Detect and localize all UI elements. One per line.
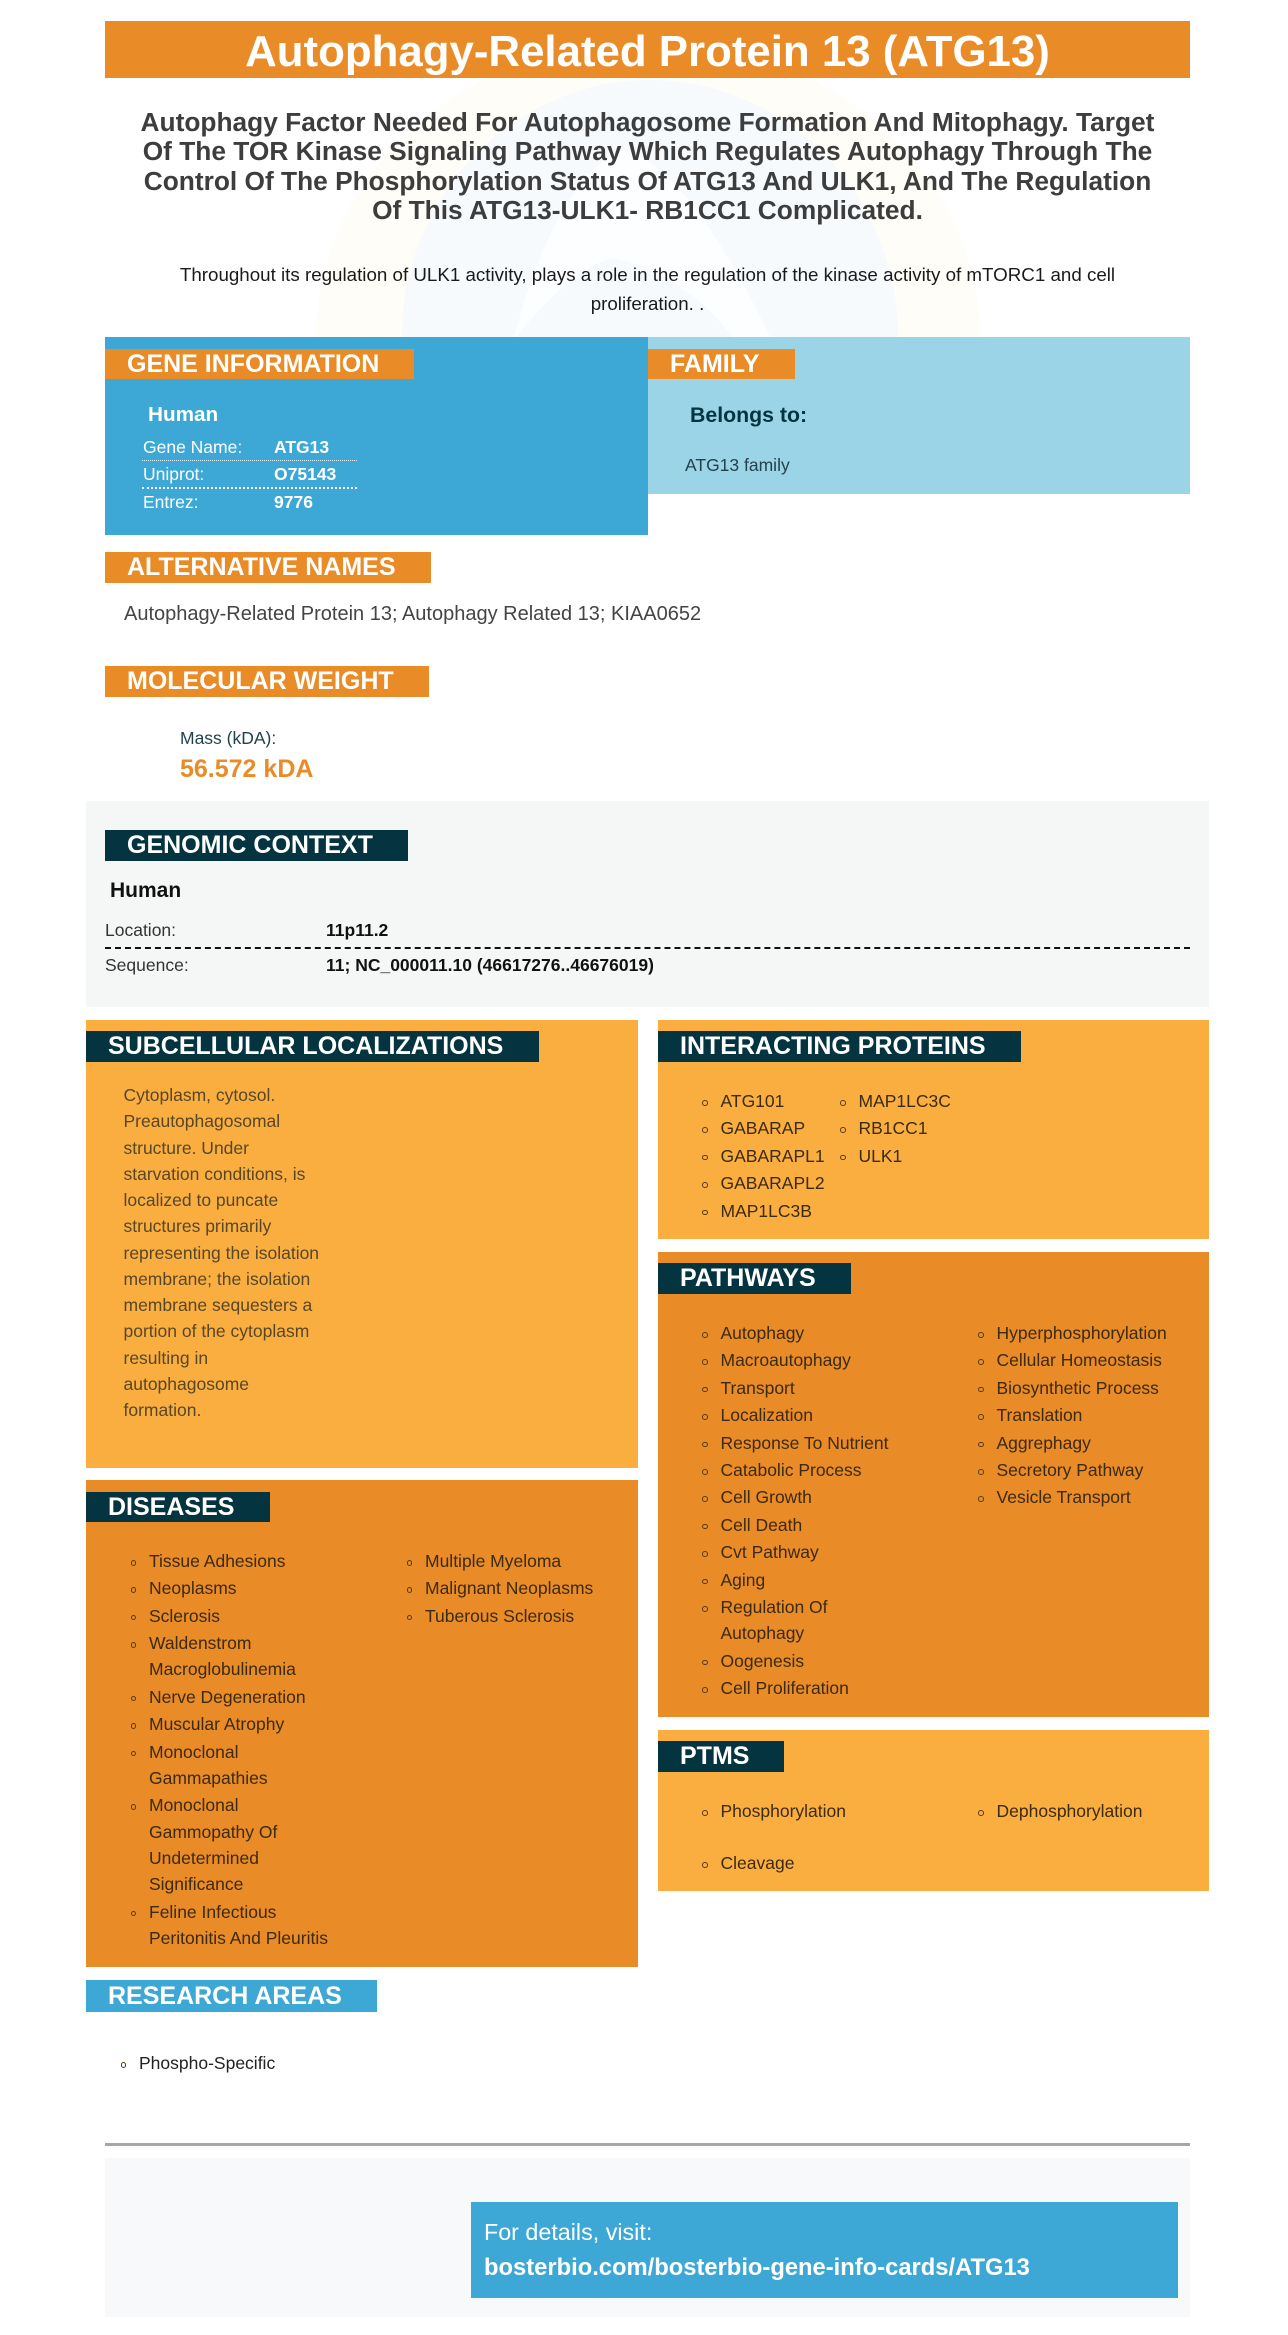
pathway list column 2: Hyperphosphorylation	[996, 1323, 1167, 1343]
heading: ptms	[658, 1741, 784, 1772]
pathway list column 2: Vesicle Transport	[996, 1487, 1131, 1507]
disease list column 1: Neoplasms	[149, 1578, 237, 1598]
gene table: Entrez:	[143, 492, 198, 512]
species label: Human	[110, 879, 181, 902]
disease list column 1: Gammapathies	[149, 1768, 268, 1788]
gene table: Gene Name:	[143, 437, 242, 457]
heading: gene information: GENE INFORMATION	[127, 350, 379, 378]
heading: pathways	[658, 1263, 851, 1294]
panel: interacting proteins	[658, 1020, 1209, 1239]
disease list column 1: Macroglobulinemia	[149, 1659, 296, 1679]
localization text: starvation conditions, is	[124, 1164, 305, 1184]
gene table: Uniprot:	[143, 464, 204, 484]
location row: 11p11.2	[326, 920, 388, 940]
pathway list column 1: Cell Proliferation	[720, 1678, 849, 1698]
protein list column 2: ULK1	[858, 1146, 902, 1166]
disease list column 1	[131, 1551, 328, 1948]
gene table	[142, 437, 357, 512]
mass value: 56.572 kDA	[180, 755, 313, 783]
disease list column 1: Sclerosis	[149, 1606, 220, 1626]
alternative names text: Autophagy-Related Protein 13; Autophagy Related 13; KIAA0652	[124, 603, 701, 625]
gene table: O75143	[274, 464, 336, 484]
heading: genomic context: GENOMIC CONTEXT	[127, 831, 373, 859]
location row	[105, 920, 388, 940]
subtitle	[141, 107, 1154, 225]
callout: details link: For details, visit:	[484, 2219, 652, 2245]
heading: family	[648, 349, 795, 379]
background watermark arches	[402, 80, 898, 337]
protein list column 1: GABARAPL1	[720, 1146, 825, 1166]
heading: pathways: PATHWAYS	[680, 1264, 816, 1292]
subtitle: Of The TOR Kinase Signaling Pathway Which Regulates Autophagy Through The	[143, 136, 1152, 166]
ptm list column 1	[702, 1801, 846, 1873]
pathway list column 1: Autophagy	[720, 1623, 804, 1643]
title: Autophagy-Related Protein 13 (ATG13)	[245, 27, 1050, 76]
heading: diseases: DISEASES	[108, 1493, 234, 1521]
pathway list column 1: Autophagy	[720, 1323, 804, 1343]
callout: details link	[471, 2202, 1178, 2298]
pathway list column 1: Macroautophagy	[720, 1350, 851, 1370]
disease list column 2	[407, 1551, 593, 1626]
sequence row	[105, 955, 654, 975]
localization text: membrane sequesters a	[124, 1295, 312, 1315]
pathway list column 2: Aggrephagy	[996, 1433, 1091, 1453]
description: Throughout its regulation of ULK1 activity, plays a role in the regulation of the kinase activity of mTORC1 and cell	[180, 264, 1115, 285]
protein list column 1: GABARAPL2	[720, 1173, 825, 1193]
heading: molecular weight: MOLECULAR WEIGHT	[127, 667, 394, 695]
disease list column 1: Peritonitis And Pleuritis	[149, 1928, 328, 1948]
pathway list column 1: Aging	[720, 1570, 765, 1590]
pathway list column 1: Transport	[720, 1378, 795, 1398]
panel: diseases	[86, 1480, 638, 1967]
protein list column 2: MAP1LC3C	[858, 1091, 951, 1111]
disease list column 1: Gammopathy Of	[149, 1822, 277, 1842]
panel: genomic context	[86, 801, 1209, 1007]
belongs to label: Belongs to:	[690, 403, 807, 427]
protein list column 1: MAP1LC3B	[720, 1201, 812, 1221]
heading: research areas: RESEARCH AREAS	[108, 1982, 342, 2010]
pathway list column 2: Translation	[996, 1405, 1082, 1425]
pathway list column 1: Cell Death	[720, 1515, 802, 1535]
subtitle: Control Of The Phosphorylation Status Of ATG13 And ULK1, And The Regulation	[144, 166, 1151, 196]
protein list column 1: GABARAP	[720, 1118, 805, 1138]
disease list column 1: Muscular Atrophy	[149, 1714, 284, 1734]
pathway list column 1	[702, 1323, 888, 1698]
localization text: membrane; the isolation	[124, 1269, 310, 1289]
protein list column 2: RB1CC1	[858, 1118, 928, 1138]
mass label: Mass (kDA):	[180, 728, 276, 748]
panel: subcellular localizations	[86, 1020, 638, 1468]
panel: family	[648, 337, 1190, 494]
location row: Location:	[105, 920, 176, 940]
pathway list column 1: Response To Nutrient	[720, 1433, 888, 1453]
pathway list column 1: Regulation Of	[720, 1597, 828, 1617]
localization text	[124, 1085, 319, 1420]
description	[180, 264, 1115, 314]
localization text: structure. Under	[124, 1138, 249, 1158]
description: proliferation. .	[591, 293, 704, 314]
subtitle: Of This ATG13-ULK1- RB1CC1 Complicated.	[372, 195, 923, 225]
disease list column 1: Feline Infectious	[149, 1902, 276, 1922]
disease list column 1: Significance	[149, 1874, 243, 1894]
pathway list column 1: Catabolic Process	[720, 1460, 862, 1480]
protein list column 2	[840, 1091, 951, 1166]
disease list column 1: Nerve Degeneration	[149, 1687, 306, 1707]
heading: ptms: PTMS	[680, 1742, 749, 1770]
ptm list column 2: Dephosphorylation	[996, 1801, 1142, 1821]
heading: subcellular localizations: SUBCELLULAR LOCALIZATIONS	[108, 1032, 503, 1060]
disease list column 2: Tuberous Sclerosis	[425, 1606, 574, 1626]
ptm list column 1: Phosphorylation	[720, 1801, 846, 1821]
localization text: representing the isolation	[124, 1242, 319, 1262]
localization text: Preautophagosomal	[124, 1111, 280, 1131]
panel: gene information	[105, 337, 648, 535]
protein list column 1: ATG101	[720, 1091, 784, 1111]
sequence row: Sequence:	[105, 955, 189, 975]
localization text: structures primarily	[124, 1216, 271, 1236]
disease list column 1: Undetermined	[149, 1848, 259, 1868]
heading: alternative names: ALTERNATIVE NAMES	[127, 553, 396, 581]
disease list column 2: Multiple Myeloma	[425, 1551, 561, 1571]
gene table: ATG13	[274, 437, 329, 457]
disease list column 1: Tissue Adhesions	[149, 1551, 286, 1571]
panel: footer	[105, 2158, 1190, 2317]
localization text: Cytoplasm, cytosol.	[124, 1085, 275, 1105]
research area list: Phospho-Specific	[139, 2053, 275, 2073]
disease list column 2: Malignant Neoplasms	[425, 1578, 593, 1598]
pathway list column 2: Biosynthetic Process	[996, 1378, 1159, 1398]
pathway list column 1: Cell Growth	[720, 1487, 812, 1507]
title	[105, 21, 1190, 78]
sequence row: 11; NC_000011.10 (46617276..46676019)	[326, 955, 654, 975]
ptm list column 1: Cleavage	[720, 1853, 794, 1873]
localization text: formation.	[124, 1400, 201, 1420]
pathway list column 2	[978, 1323, 1167, 1507]
pathway list column 1: Cvt Pathway	[720, 1542, 819, 1562]
panel: ptms	[658, 1730, 1209, 1891]
disease list column 1: Waldenstrom	[149, 1633, 251, 1653]
localization text: resulting in	[124, 1348, 208, 1368]
pathway list column 1: Oogenesis	[720, 1651, 804, 1671]
localization text: autophagosome	[124, 1374, 249, 1394]
pathway list column 2: Cellular Homeostasis	[996, 1350, 1162, 1370]
heading: interacting proteins: INTERACTING PROTEINS	[680, 1032, 986, 1060]
disease list column 1: Monoclonal	[149, 1795, 238, 1815]
disease list column 1: Monoclonal	[149, 1742, 238, 1762]
callout: details link: bosterbio.com/bosterbio-gene-info-cards/ATG13	[484, 2254, 1030, 2281]
family name: ATG13 family	[685, 455, 790, 475]
localization text: portion of the cytoplasm	[124, 1321, 309, 1341]
panel: pathways	[658, 1252, 1209, 1717]
protein list column 1	[702, 1091, 825, 1221]
heading: family: FAMILY	[670, 350, 759, 378]
localization text: localized to puncate	[124, 1190, 278, 1210]
pathway list column 2: Secretory Pathway	[996, 1460, 1143, 1480]
heading: diseases	[86, 1492, 270, 1522]
species label: Human	[148, 403, 218, 426]
gene table: 9776	[274, 492, 313, 512]
pathway list column 1: Localization	[720, 1405, 813, 1425]
subtitle: Autophagy Factor Needed For Autophagosome Formation And Mitophagy. Target	[141, 107, 1154, 137]
